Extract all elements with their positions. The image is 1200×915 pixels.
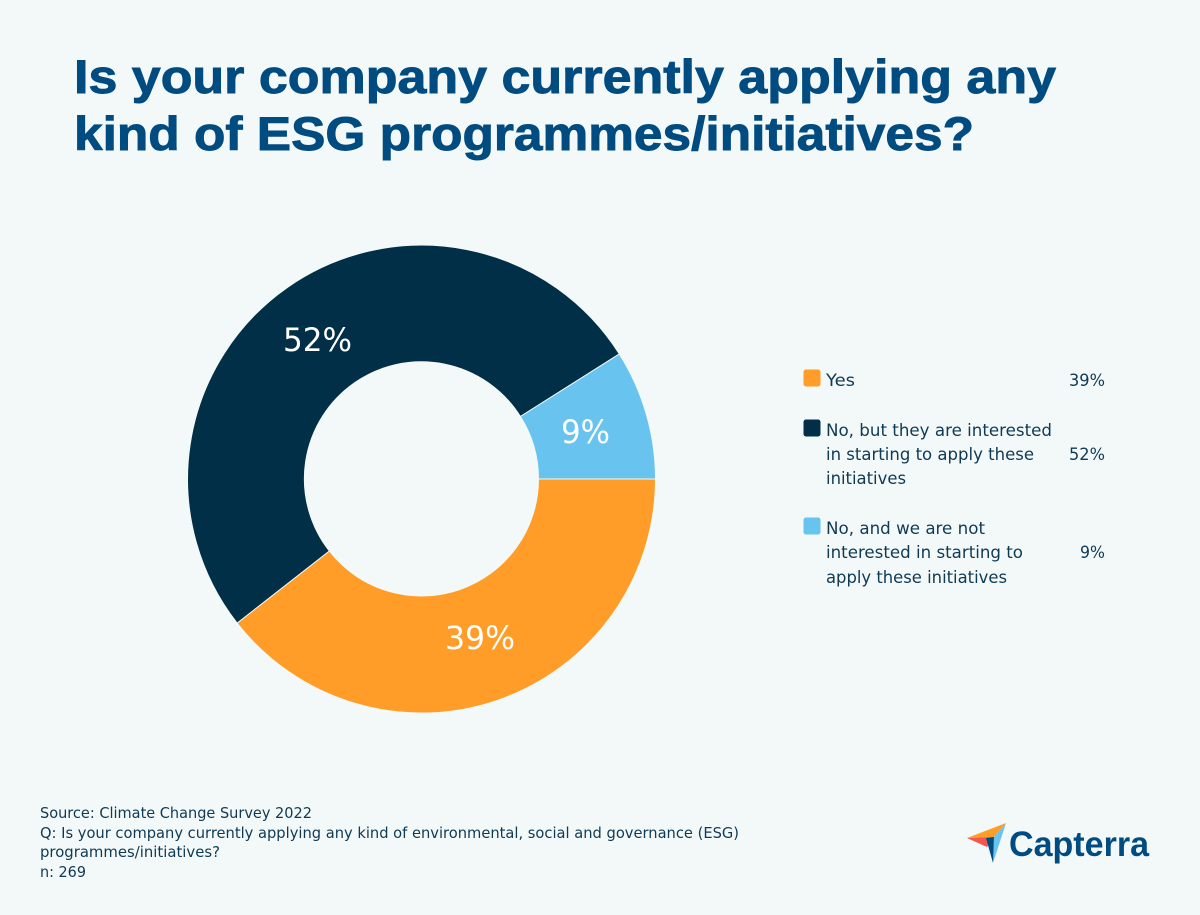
logo: Capterra: Capterra (1009, 825, 1150, 864)
value label: 52%: 52% (283, 321, 352, 359)
legend item: Yes (804, 370, 1105, 390)
source note (40, 804, 739, 881)
segment: No, not interested 9% (520, 354, 656, 479)
source note: Source: Climate Change Survey 2022 (40, 804, 312, 822)
legend item: No, not interested: apply these initiatives (826, 568, 1007, 587)
legend item: No, interested: in starting to apply these (826, 445, 1034, 464)
legend item: No, interested: initiatives (826, 469, 906, 488)
legend item: Yes: Yes (825, 371, 855, 390)
title (74, 50, 1056, 160)
legend item: No, interested (804, 420, 1105, 488)
legend (804, 370, 1105, 587)
source note: Q: Is your company currently applying any kind of environmental, social and governance (ESG) (40, 824, 739, 842)
donut chart (188, 245, 656, 713)
source note: n: 269 (40, 863, 86, 881)
legend item: No, interested: No, but they are interested (826, 421, 1052, 440)
title: Is your company currently applying any (74, 50, 1056, 103)
legend item: No, not interested (804, 518, 1105, 587)
legend item: No, not interested: interested in starting to (826, 543, 1023, 562)
legend item: No, not interested: 9% (1080, 543, 1105, 562)
title: kind of ESG programmes/initiatives? (74, 107, 974, 160)
legend item: No, not interested: No, and we are not (826, 519, 986, 538)
value label: 39%: 39% (445, 619, 515, 657)
segment: No, interested 52% (188, 245, 619, 623)
value label: 9%: 9% (561, 413, 610, 451)
icon: Capterra arrow (967, 823, 1006, 863)
source note: programmes/initiatives? (40, 843, 220, 861)
segment: Yes 39% (237, 479, 656, 713)
legend item: Yes: 39% (1069, 371, 1105, 390)
legend item: No, interested: 52% (1069, 445, 1105, 464)
